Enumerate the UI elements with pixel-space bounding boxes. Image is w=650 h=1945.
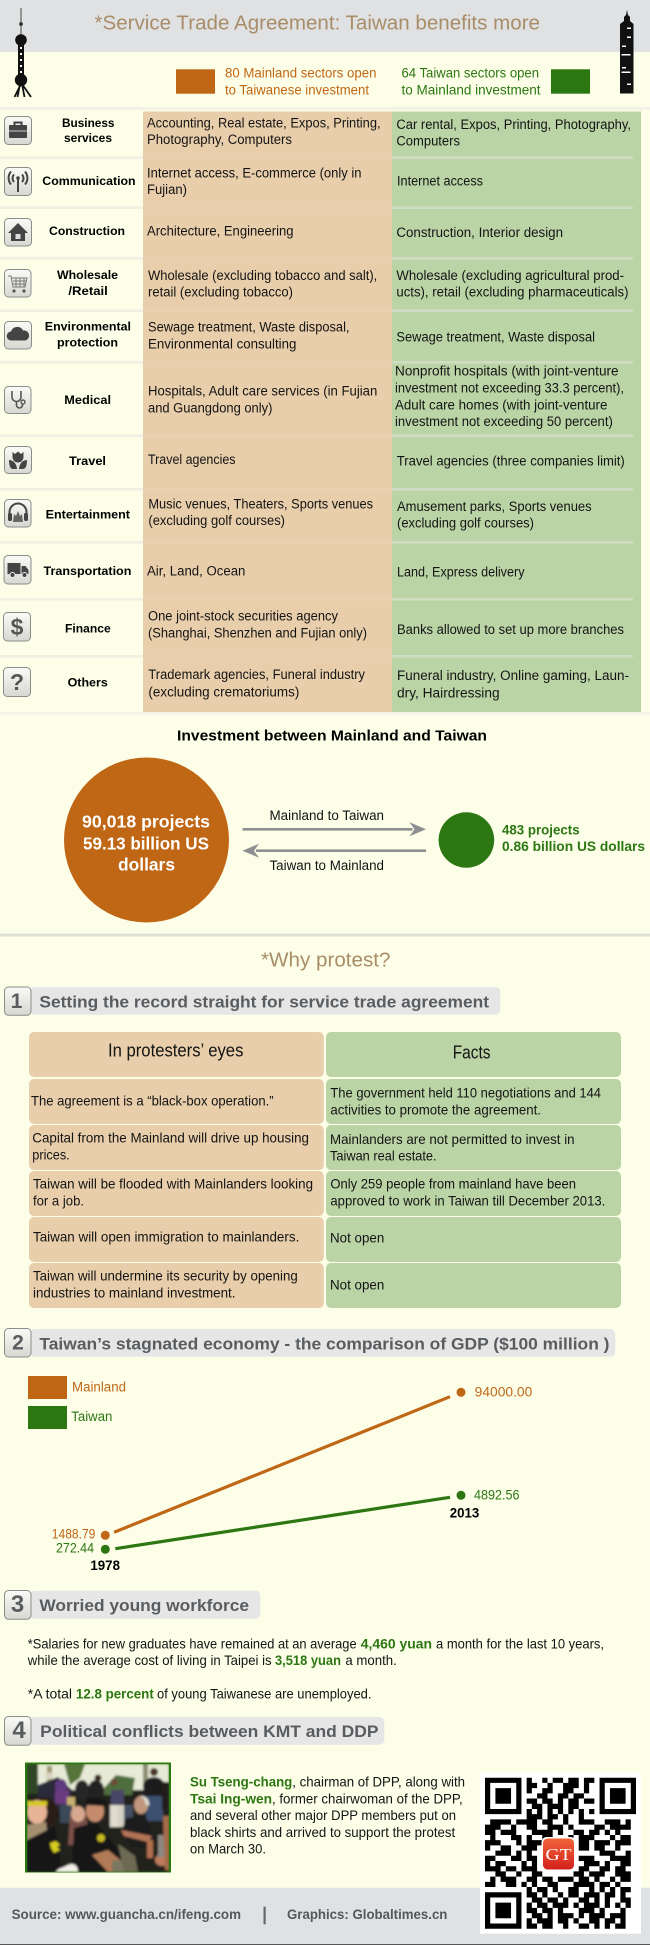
legend: Taiwan sectors (402, 66, 590, 97)
row: others (4, 667, 629, 700)
Taiwan investment circle: 483 projects (502, 821, 580, 837)
line chart: GDP comparison (28, 1376, 532, 1573)
row: communication (4, 165, 483, 197)
section 4 heading: 4 (12, 1717, 26, 1744)
icon: GT logo (542, 1837, 576, 1871)
series: mainland line: 1488.79 (52, 1526, 95, 1541)
QR code with GT logo (480, 1773, 641, 1934)
row: medical: Adult care homes (with joint-venture (395, 397, 607, 412)
row: wholesale/retail: retail (excluding tobacco) (148, 285, 293, 300)
row: entertainment: (excluding golf courses) (397, 516, 534, 531)
row: others: dry, Hairdressing (397, 685, 500, 700)
series: mainland line: 94000.00 (475, 1385, 532, 1400)
footer: source: Source: www.guancha.cn/ifeng.com (12, 1906, 241, 1922)
row: travel (4, 446, 625, 474)
mainland investment circle: 90,018 projects (82, 812, 210, 832)
row: construction (4, 218, 563, 246)
section 4 heading (4, 1716, 384, 1745)
icon: tulip (4, 446, 32, 474)
row: medical: Nonprofit hospitals (with joint-venture (395, 364, 619, 379)
row: communication: Internet access (397, 174, 483, 189)
icon: Taipei 101 tower (620, 10, 634, 94)
row: environmental protection: Sewage treatment, Waste disposal (396, 330, 595, 345)
panel: protesters vs facts table (29, 1032, 621, 1308)
panel: protesters vs facts table: Only 259 people from mainland have been (330, 1176, 576, 1192)
row: wholesale/retail (4, 268, 628, 300)
row: finance (4, 609, 624, 641)
panel: protesters vs facts table: In protesters’ eyes (108, 1041, 243, 1061)
footer band (0, 1888, 650, 1944)
row: business services (4, 115, 631, 149)
text: unemployment: *A total (28, 1686, 72, 1702)
title: *Service Trade Agreement: Taiwan benefits more (94, 12, 540, 34)
row: communication: Fujian) (147, 182, 187, 197)
row: wholesale/retail: Wholesale (excluding agricultural prod- (396, 268, 624, 283)
row: business services: Accounting, Real estate, Expos, Printing, (147, 115, 381, 130)
row: travel: Travel agencies (148, 452, 236, 467)
row: entertainment: Entertainment (46, 507, 130, 521)
panel: protesters vs facts table: Capital from the Mainland will drive up housing (32, 1129, 309, 1145)
row: construction: Construction, Interior design (396, 225, 563, 240)
row: construction: Architecture, Engineering (147, 223, 294, 238)
panel: protesters vs facts table: Taiwan will be flooded with Mainlanders looking (33, 1176, 313, 1192)
icon: truck (4, 556, 31, 584)
text: unemployment: of young Taiwanese are unemployed. (157, 1686, 372, 1702)
panel: protesters vs facts table: prices. (32, 1146, 70, 1162)
row: environmental protection: Environmental (45, 320, 131, 334)
section 2 heading: 2 (12, 1332, 24, 1354)
row: medical: Hospitals, Adult care services (in Fujian (148, 384, 377, 399)
section 3 heading: Worried young workforce (39, 1596, 249, 1615)
text: salaries: a month. (345, 1652, 397, 1668)
row: business services: services (64, 131, 112, 145)
section 1 heading: Setting the record straight for service trade agreement (39, 992, 489, 1011)
panel: protesters vs facts table: industries to mainland investment. (33, 1284, 236, 1300)
row: others: Funeral industry, Online gaming, Laun- (397, 668, 629, 683)
icon: dollar sign (4, 612, 30, 641)
photo: DPP members at protest (25, 1762, 171, 1872)
legend: Taiwan sectors: 64 Taiwan sectors open (402, 66, 539, 81)
row: transportation: Land, Express delivery (397, 565, 525, 580)
text: salaries: a month for the last 10 years, (436, 1635, 604, 1651)
footer: graphics credit: Graphics: Globaltimes.cn (287, 1906, 447, 1922)
mainland investment circle (64, 758, 229, 922)
panel: protesters vs facts table: Not open (330, 1276, 384, 1292)
legend: Taiwan: Taiwan (71, 1409, 112, 1424)
legend: mainland sectors: 80 Mainland sectors open (225, 66, 376, 81)
row: wholesale/retail: Wholesale (57, 268, 118, 282)
row: construction: Construction (49, 224, 125, 238)
text: DPP paragraph: Tsai Ing-wen (190, 1790, 272, 1806)
text: DPP paragraph: on March 30. (190, 1841, 266, 1857)
row: communication: Internet access, E-commerce (only in (147, 165, 362, 180)
icon: cloud (4, 322, 32, 349)
legend: mainland: Mainland (72, 1380, 126, 1395)
text: salaries: while the average cost of living in Taipei is (27, 1652, 272, 1668)
text: salaries: *Salaries for new graduates have remained at an average (28, 1635, 357, 1651)
text: DPP paragraph: and several other major DPP members put on (190, 1807, 456, 1823)
icon: shopping cart (4, 270, 31, 297)
icon: briefcase (4, 116, 32, 144)
panel: protesters vs facts table: for a job. (33, 1192, 84, 1208)
text: salaries: 4,460 yuan (361, 1635, 432, 1651)
panel: protesters vs facts table: Taiwan will open immigration to mainlanders. (33, 1229, 299, 1245)
panel: protesters vs facts table: Not open (330, 1230, 384, 1246)
row: medical: Medical (64, 393, 111, 407)
arrow: mainland to Taiwan (242, 808, 426, 836)
row: entertainment: Amusement parks, Sports venues (397, 499, 592, 514)
row: business services: Business (62, 116, 115, 130)
row: business services: Car rental, Expos, Printing, Photography, (396, 117, 631, 132)
icon: GT logo: GT (546, 1845, 572, 1864)
row: environmental protection: Environmental consulting (148, 336, 296, 351)
section 1 heading (4, 987, 500, 1015)
Taiwan investment circle (439, 812, 645, 868)
header band (0, 0, 650, 52)
panel: protesters vs facts table: Taiwan real estate. (330, 1148, 437, 1164)
row: entertainment: Music venues, Theaters, Sports venues (148, 496, 373, 511)
series: Taiwan line: 272.44 (56, 1541, 94, 1556)
panel: protesters vs facts table: approved to work in Taiwan till December 2013. (330, 1192, 605, 1208)
text: unemployment: 12.8 percent (76, 1686, 154, 1702)
row: business services: Computers (396, 134, 460, 149)
mainland investment circle: 59.13 billion US (83, 833, 209, 853)
row: transportation: Air, Land, Ocean (147, 564, 245, 579)
row: medical: investment not exceeding 33.3 percent), (395, 381, 624, 396)
text: unemployment (28, 1686, 372, 1702)
row: environmental protection: protection (57, 336, 118, 350)
row: finance: Finance (65, 621, 111, 635)
row: wholesale/retail: ucts), retail (excluding pharmaceuticals) (396, 285, 628, 300)
section 3 heading (4, 1590, 260, 1619)
legend: Taiwan (28, 1406, 112, 1429)
section 2 heading: Taiwan’s stagnated economy - the comparison of GDP ($100 million ) (39, 1334, 609, 1353)
icon: house (4, 218, 32, 246)
axis label: 2013: 2013 (450, 1505, 480, 1520)
section 1 heading: 1 (11, 990, 23, 1013)
row: medical (4, 364, 624, 429)
row: medical: and Guangdong only) (148, 400, 272, 415)
panel: sector comparison table (0, 107, 650, 714)
row: finance: One joint-stock securities agency (148, 609, 338, 624)
row: business services: Photography, Computers (147, 132, 292, 147)
heading: investment: Investment between Mainland and Taiwan (177, 729, 487, 745)
panel: protesters vs facts table: Mainlanders are not permitted to invest in (330, 1131, 575, 1147)
panel: protesters vs facts table: activities to promote the agreement. (330, 1101, 541, 1117)
text: DPP paragraph: black shirts and arrived to support the protest (190, 1824, 455, 1840)
section 3 heading: 3 (11, 1591, 24, 1618)
text: DPP paragraph: Su Tseng-chang (190, 1774, 292, 1790)
icon: stethoscope (4, 386, 31, 414)
row: others: Trademark agencies, Funeral industry (148, 667, 365, 682)
row: entertainment (4, 496, 592, 531)
icon: headphones (4, 500, 31, 527)
section 4 heading: Political conflicts between KMT and DDP (40, 1722, 378, 1741)
legend: mainland sectors (176, 66, 376, 97)
row: travel: Travel agencies (three companies limit) (397, 454, 625, 469)
panel: protesters vs facts table: Facts (453, 1042, 490, 1062)
row: wholesale/retail: Wholesale (excluding tobacco and salt), (148, 268, 377, 283)
text: DPP paragraph: , former chairwoman of the DPP, (272, 1790, 463, 1806)
panel: protesters vs facts table: Taiwan will undermine its security by opening (33, 1268, 298, 1284)
series: Taiwan line: 4892.56 (474, 1487, 520, 1502)
row: medical: investment not exceeding 50 percent) (395, 414, 613, 429)
series: mainland line (52, 1385, 532, 1541)
legend: mainland sectors: to Taiwanese investment (225, 82, 369, 97)
icon: Shanghai Oriental Pearl tower (14, 8, 31, 97)
axis label: 1978: 1978 (90, 1558, 120, 1573)
row: finance: (Shanghai, Shenzhen and Fujian only) (148, 625, 367, 640)
mainland investment circle: dollars (118, 855, 175, 875)
row: communication: Communication (42, 174, 136, 188)
row: others: Others (68, 676, 108, 690)
legend: mainland (28, 1376, 126, 1399)
arrow: mainland to Taiwan: Mainland to Taiwan (270, 808, 384, 823)
text: salaries (27, 1635, 604, 1668)
section 2 heading (4, 1328, 615, 1357)
text: DPP paragraph: , chairman of DPP, along with (292, 1774, 465, 1790)
row: entertainment: (excluding golf courses) (148, 513, 285, 528)
row: environmental protection: Sewage treatment, Waste disposal, (148, 320, 350, 335)
row: others: (excluding crematoriums) (148, 685, 299, 700)
series: Taiwan line (56, 1487, 520, 1556)
row: finance: Banks allowed to set up more branches (397, 622, 624, 637)
row: travel: Travel (69, 454, 106, 468)
heading: why protest: *Why protest? (261, 950, 390, 972)
icon: question mark: ? (10, 669, 24, 695)
arrow: Taiwan to mainland: Taiwan to Mainland (270, 858, 384, 873)
row: transportation: Transportation (44, 564, 131, 578)
icon: antenna (4, 168, 32, 196)
panel: protesters vs facts table: The agreement is a “black-box operation.” (31, 1093, 274, 1109)
row: wholesale/retail: /Retail (68, 284, 108, 298)
row: transportation (4, 556, 525, 584)
icon: question mark (4, 668, 30, 696)
icon: dollar sign: $ (11, 614, 24, 640)
panel: protesters vs facts table: The government held 110 negotiations and 144 (330, 1084, 601, 1100)
text: DPP paragraph (190, 1774, 465, 1857)
row: environmental protection (4, 320, 595, 351)
legend: Taiwan sectors: to Mainland investment (402, 82, 541, 97)
Taiwan investment circle: 0.86 billion US dollars (502, 838, 645, 854)
text: salaries: 3,518 yuan (275, 1652, 341, 1668)
arrow: Taiwan to mainland (242, 844, 426, 873)
